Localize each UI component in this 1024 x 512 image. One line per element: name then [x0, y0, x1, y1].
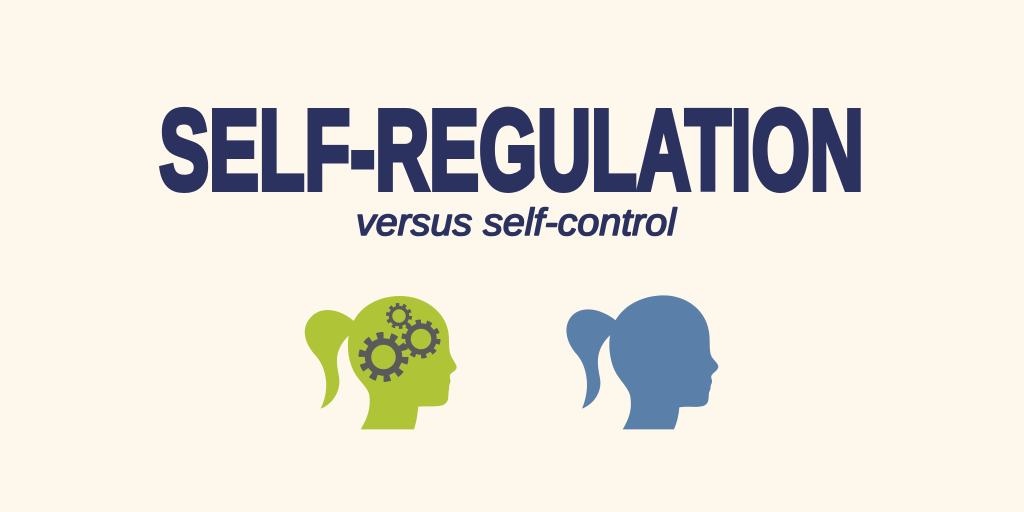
small gear	[388, 305, 410, 327]
large gear	[362, 336, 404, 378]
icon: blue head silhouette	[566, 295, 718, 429]
medium gear	[404, 322, 438, 356]
icon: green head with gears	[305, 296, 457, 429]
subtitle: versus self-control	[356, 202, 678, 244]
green head silhouette	[305, 296, 457, 429]
